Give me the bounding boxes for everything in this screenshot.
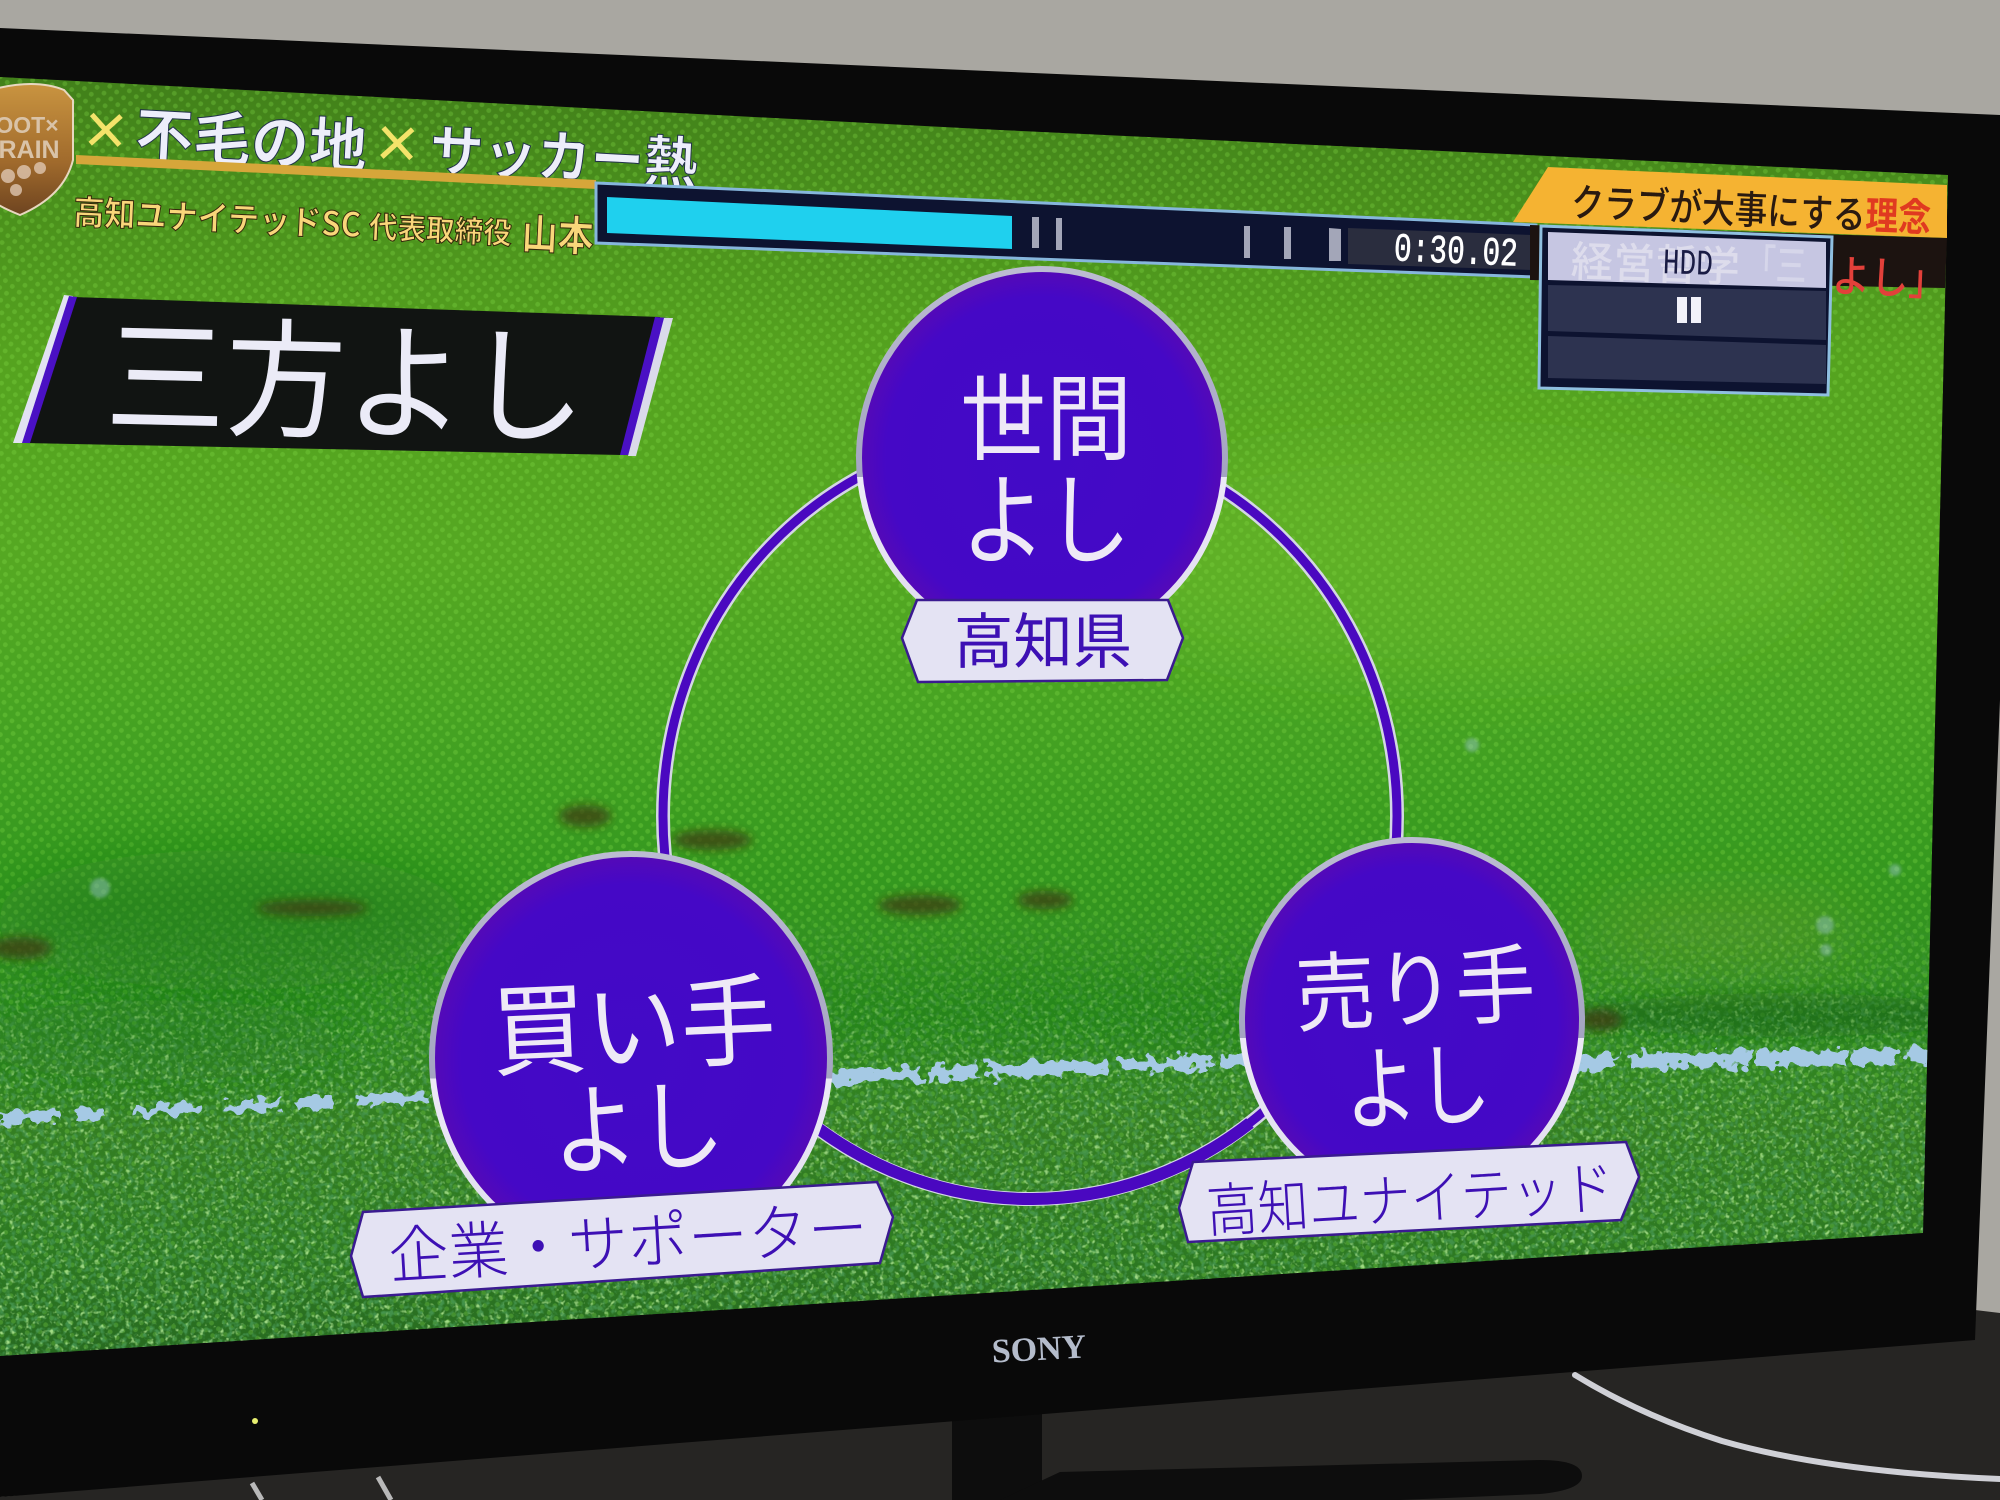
three-way ring connecting the circles [663, 433, 1397, 1199]
desk cable [1575, 1375, 2000, 1479]
panel: title 三方よし: 三方よし [104, 275, 588, 470]
headline: ×不毛の地×サッカー熱: 不毛の地 [133, 87, 369, 187]
label: 高知県 [902, 594, 1183, 682]
HDD status panel: HDD [1662, 243, 1714, 286]
circle: 売り手よし / 高知ユナイテッド: 売り手 [1292, 915, 1538, 1050]
HDD status panel: 「三 [1744, 231, 1808, 294]
lens sparkles [90, 738, 1901, 956]
circle: 世間よし / 高知県 [859, 269, 1225, 682]
power LED [252, 1418, 258, 1424]
honeycomb motif [1, 162, 46, 196]
circle: 売り手よし / 高知ユナイテッド [1179, 840, 1639, 1249]
guest caption: name and title: 代表取締役 [368, 202, 513, 253]
circle: 買い手よし / 企業・サポーター [351, 854, 893, 1297]
headline: ×不毛の地×サッカー熱: サッカー熱 [428, 106, 700, 201]
pause icon [1677, 297, 1701, 323]
circle: 世間よし / 高知県: 世間 [960, 344, 1132, 480]
panel header row [1548, 232, 1826, 288]
headline: ×不毛の地×サッカー熱: × [371, 104, 424, 178]
HDD status panel [1539, 226, 1832, 395]
circle: 世間よし / 高知県: よし [961, 440, 1131, 585]
white pitch line [0, 1056, 1930, 1118]
elapsed time readout [1348, 228, 1532, 270]
desk surface [0, 1310, 2000, 1500]
small desk lines [252, 1477, 391, 1500]
headline: ×不毛の地×サッカー熱 [78, 85, 700, 204]
brand logo: SONY: SONY [991, 1329, 1087, 1370]
HDD status panel: 経営哲学 [1570, 228, 1741, 295]
dirt patches on the pitch [0, 805, 1622, 1031]
label: 企業・サポーター: 企業・サポーター [386, 1178, 870, 1296]
playback bar overlay [596, 183, 1536, 279]
progress fill [607, 197, 1012, 249]
guest caption: name and title: 山本 [521, 200, 595, 265]
headline: ×不毛の地×サッカー熱: × [79, 91, 133, 165]
circle: 売り手よし / 高知ユナイテッド: よし [1341, 1011, 1493, 1150]
guest caption: name and title [72, 180, 595, 265]
playback bar overlay: 0:30.02 [1393, 228, 1519, 279]
panel empty row [1548, 336, 1826, 384]
circle: 買い手よし / 企業・サポーター: 買い手 [488, 940, 778, 1097]
television stand [952, 1410, 1582, 1500]
panel status row [1548, 285, 1826, 340]
black strap: 経営哲学「三方よし」: 経営哲学「三方よし」 [1564, 230, 1948, 309]
gold rule under headline [76, 155, 596, 189]
corner logo shield: FOOT×BRAIN [0, 84, 73, 215]
label: 高知ユナイテッド: 高知ユナイテッド [1204, 1141, 1616, 1249]
guest caption: name and title: 高知ユナイテッドSC [72, 185, 362, 247]
orange topic banner: クラブが大事にする理念: クラブが大事にする理念 [1570, 172, 1932, 244]
circle: 買い手よし / 企業・サポーター: よし [549, 1044, 727, 1197]
label: 高知県: 高知県 [954, 594, 1132, 681]
chapter ticks [1032, 217, 1341, 261]
